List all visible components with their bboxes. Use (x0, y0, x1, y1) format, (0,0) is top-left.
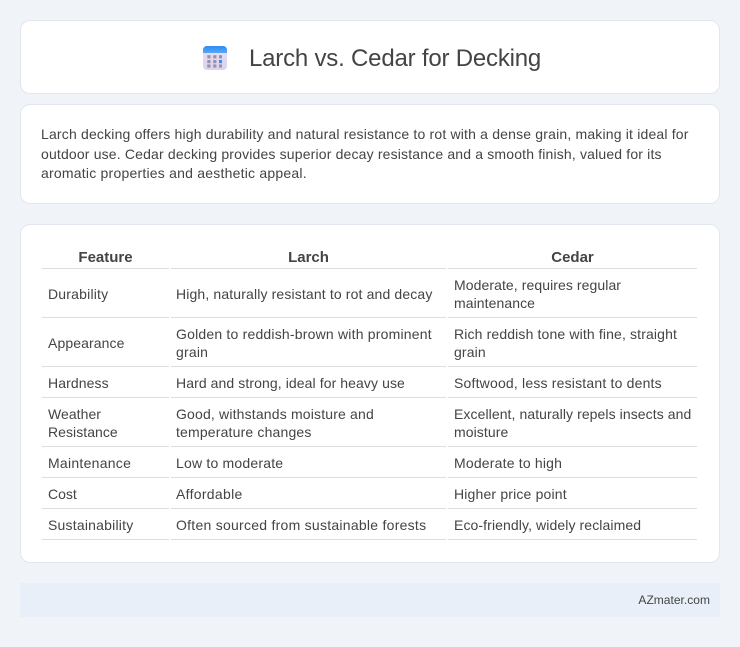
row: Maintenance (42, 455, 697, 478)
row: Weather Resistance: temperature changes (176, 424, 312, 440)
table header: Cedar (551, 249, 594, 266)
footer credit: AZmater.com (638, 593, 710, 607)
intro text: aromatic properties and aesthetic appeal. (41, 165, 307, 181)
table header: Feature (78, 249, 133, 266)
row: Appearance: Appearance (48, 335, 125, 351)
panel: title card (20, 20, 720, 94)
panel: comparison table (20, 224, 720, 563)
row: Weather Resistance: Good, withstands moisture and (176, 406, 374, 422)
row: Weather Resistance: Resistance (48, 424, 118, 440)
table header: Larch (288, 249, 329, 266)
row: Weather Resistance: Weather (48, 406, 101, 422)
row: Sustainability (42, 517, 697, 540)
row: Sustainability: Sustainability (48, 517, 133, 533)
row: Hardness: Softwood, less resistant to dents (454, 375, 662, 391)
row: Sustainability: Often sourced from sustainable forests (176, 517, 426, 533)
panel: intro text card (20, 104, 720, 204)
row: Appearance: grain (176, 344, 208, 360)
table header (42, 249, 697, 269)
row: Durability: High, naturally resistant to rot and decay (176, 286, 432, 302)
row: Weather Resistance (42, 406, 697, 447)
row: Cost (42, 486, 697, 509)
row: Appearance: Rich reddish tone with fine, straight (454, 326, 677, 342)
row: Cost: Cost (48, 486, 77, 502)
row: Durability: Moderate, requires regular (454, 277, 621, 293)
footer bar (20, 583, 720, 617)
row: Cost: Higher price point (454, 486, 567, 502)
row: Weather Resistance: moisture (454, 424, 508, 440)
intro text (41, 126, 689, 181)
row: Hardness (42, 375, 697, 398)
row: Hardness: Hardness (48, 375, 109, 391)
row: Maintenance: Low to moderate (176, 455, 283, 471)
intro text: outdoor use. Cedar decking provides superior decay resistance and a smooth finish, valued for its (41, 146, 662, 162)
row: Durability: Durability (48, 286, 108, 302)
row: Durability: maintenance (454, 295, 535, 311)
row: Weather Resistance: Excellent, naturally repels insects and (454, 406, 691, 422)
row: Hardness: Hard and strong, ideal for heavy use (176, 375, 405, 391)
row: Sustainability: Eco-friendly, widely reclaimed (454, 517, 641, 533)
row: Appearance: grain (454, 344, 486, 360)
row: Maintenance: Maintenance (48, 455, 131, 471)
title: Larch vs. Cedar for Decking (249, 45, 541, 72)
icon: calendar (203, 46, 227, 70)
intro text: Larch decking offers high durability and natural resistance to rot with a dense grain, making it ideal for (41, 126, 689, 142)
row: Appearance: Golden to reddish-brown with prominent (176, 326, 432, 342)
row: Durability (42, 277, 697, 318)
row: Cost: Affordable (176, 486, 243, 502)
row: Appearance (42, 326, 697, 367)
row: Maintenance: Moderate to high (454, 455, 562, 471)
